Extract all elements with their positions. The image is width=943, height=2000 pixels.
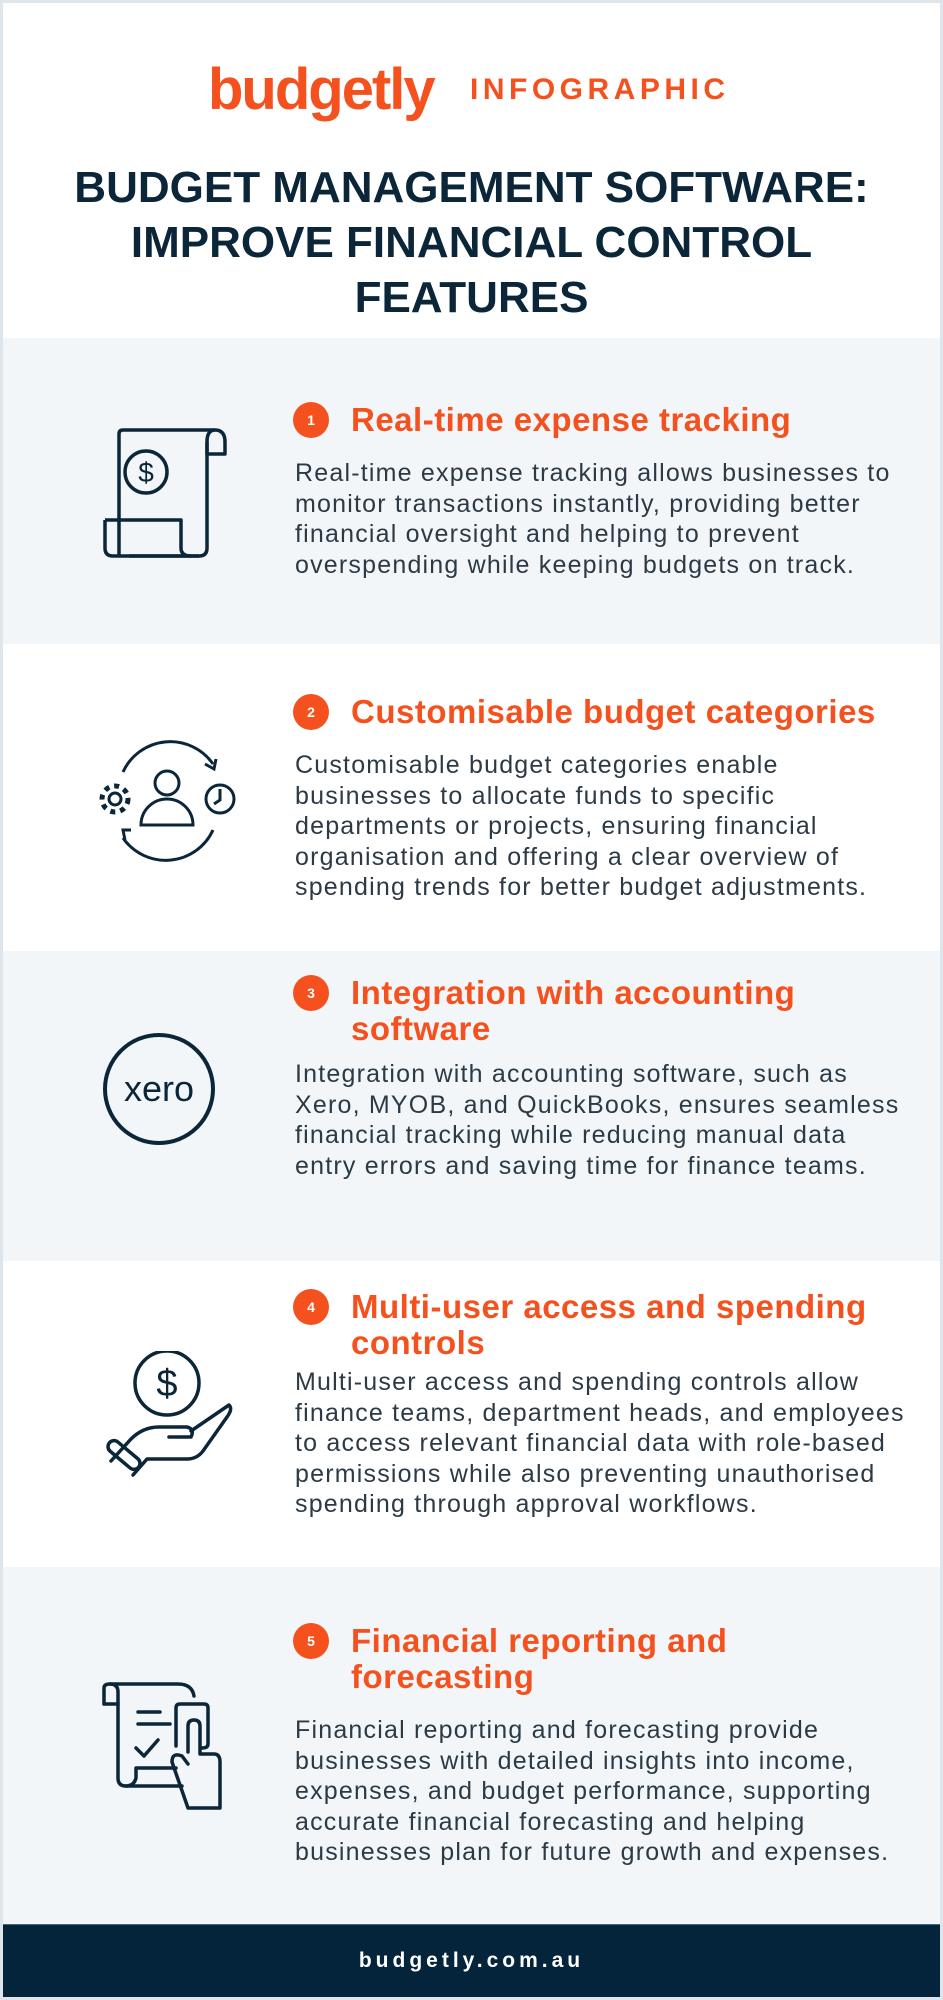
badge 1 [293,402,329,438]
body text: Real-time expense tracking allows businesses to [295,459,891,487]
body text: monitor transactions instantly, providing better [295,490,861,518]
body text: Multi-user access and spending controls allow [295,1368,859,1396]
heading [351,1288,867,1361]
body text [295,1716,889,1866]
icon: scroll with dollar [103,428,227,558]
panel: financial reporting [3,1567,940,1924]
heading: software [351,1010,491,1047]
badge 4 [293,1289,329,1325]
body text: businesses with detailed insights into income, [295,1746,855,1774]
heading: Customisable budget categories [351,693,876,730]
title: FEATURES [355,273,588,322]
footer url: budgetly.com.au [359,1949,584,1972]
badge 5: 5 [307,1633,315,1649]
heading: Multi-user access and spending [351,1288,867,1325]
panel: integration with accounting software [3,951,940,1261]
panel: customisable budget categories [100,693,876,901]
body text [295,751,867,901]
heading: Integration with accounting [351,974,795,1011]
badge 3: 3 [307,985,315,1001]
panel: multi-user access [106,1288,905,1518]
body text: businesses plan for future growth and expenses. [295,1838,889,1866]
body text [295,459,891,578]
body text: accurate financial forecasting and helping [295,1808,805,1836]
icon: hand with coin: $ [156,1363,178,1405]
body text: organisation and offering a clear overview of [295,842,839,870]
body text: financial tracking while reducing manual data [295,1121,847,1149]
icon: xero logo [103,1033,215,1145]
title [74,163,869,322]
body text: Xero, MYOB, and QuickBooks, ensures seamless [295,1090,899,1118]
heading [351,1622,727,1695]
body text [295,1368,905,1518]
body text: Financial reporting and forecasting provide [295,1716,819,1744]
heading: controls [351,1324,485,1361]
heading: forecasting [351,1658,534,1695]
body text: finance teams, department heads, and employees [295,1398,905,1426]
logo: budgetly [208,57,434,122]
icon: hand with coin [106,1351,232,1477]
title: IMPROVE FINANCIAL CONTROL [131,218,812,267]
body text: spending through approval workflows. [295,1490,758,1518]
body text [295,1060,899,1180]
icon: cycle person [100,740,236,862]
body text: Customisable budget categories enable [295,751,779,779]
icon: xero logo: xero [124,1068,194,1109]
badge 3 [293,975,329,1011]
badge 2: 2 [307,704,315,720]
heading [351,974,795,1047]
badge 1: 1 [307,412,315,428]
infographic label: INFOGRAPHIC [470,73,730,106]
body text: overspending while keeping budgets on track. [295,550,855,578]
icon: document with hand [102,1682,222,1810]
badge 5 [293,1623,329,1659]
body text: businesses to allocate funds to specific [295,782,775,810]
body text: Integration with accounting software, such as [295,1060,848,1088]
body text: spending trends for better budget adjustments. [295,873,867,901]
panel: real-time expense tracking [3,338,940,644]
badge 4: 4 [307,1299,315,1315]
body text: financial oversight and helping to prevent [295,520,800,548]
body text: entry errors and saving time for finance teams. [295,1152,867,1180]
heading: Real-time expense tracking [351,401,791,438]
body text: permissions while also preventing unauthorised [295,1460,876,1488]
body text: departments or projects, ensuring financial [295,812,818,840]
heading: Financial reporting and [351,1622,727,1659]
title: BUDGET MANAGEMENT SOFTWARE: [74,163,869,212]
body text: to access relevant financial data with role-based [295,1429,886,1457]
badge 2 [293,694,329,730]
body text: expenses, and budget performance, supporting [295,1777,872,1805]
icon: scroll with dollar: $ [138,457,154,488]
header [74,57,869,322]
footer [3,1924,940,1997]
